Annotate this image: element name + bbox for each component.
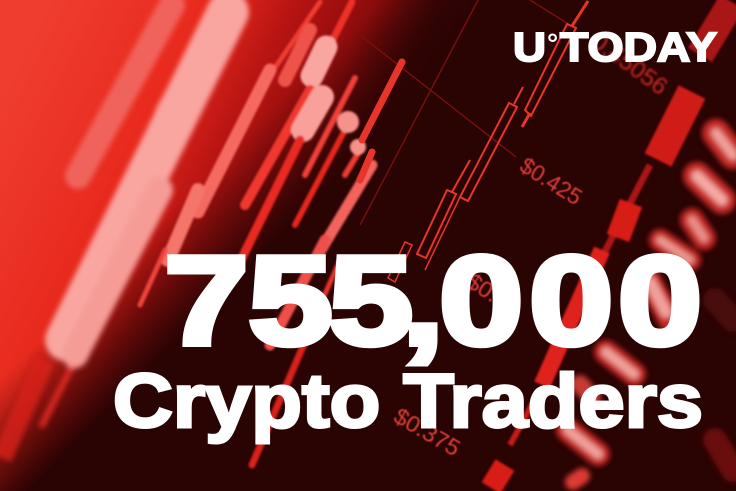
- blurred order-book figures: [568, 133, 733, 482]
- logo: U°Today: [513, 24, 717, 70]
- price label: $0.375: $0.375: [390, 403, 465, 461]
- order-book divider band: [491, 2, 732, 488]
- headline number: 755,000: [164, 231, 702, 371]
- logo: U°Today: U: [513, 24, 546, 70]
- logo: U°Today: TODAY: [560, 24, 717, 70]
- price grid lines: [360, 0, 570, 225]
- headline subtitle: Crypto Traders: [113, 359, 703, 444]
- price label: $0.425: $0.425: [515, 152, 587, 210]
- mid-field candlesticks: [140, 2, 372, 465]
- blurred candlestick bars on the left: [2, 5, 228, 458]
- logo: U°Today: °: [547, 28, 558, 59]
- price label: 45056: 0.45056: [586, 28, 673, 101]
- sharp candlesticks: [360, 1, 588, 282]
- price label: $0.4: $0.4: [462, 268, 514, 314]
